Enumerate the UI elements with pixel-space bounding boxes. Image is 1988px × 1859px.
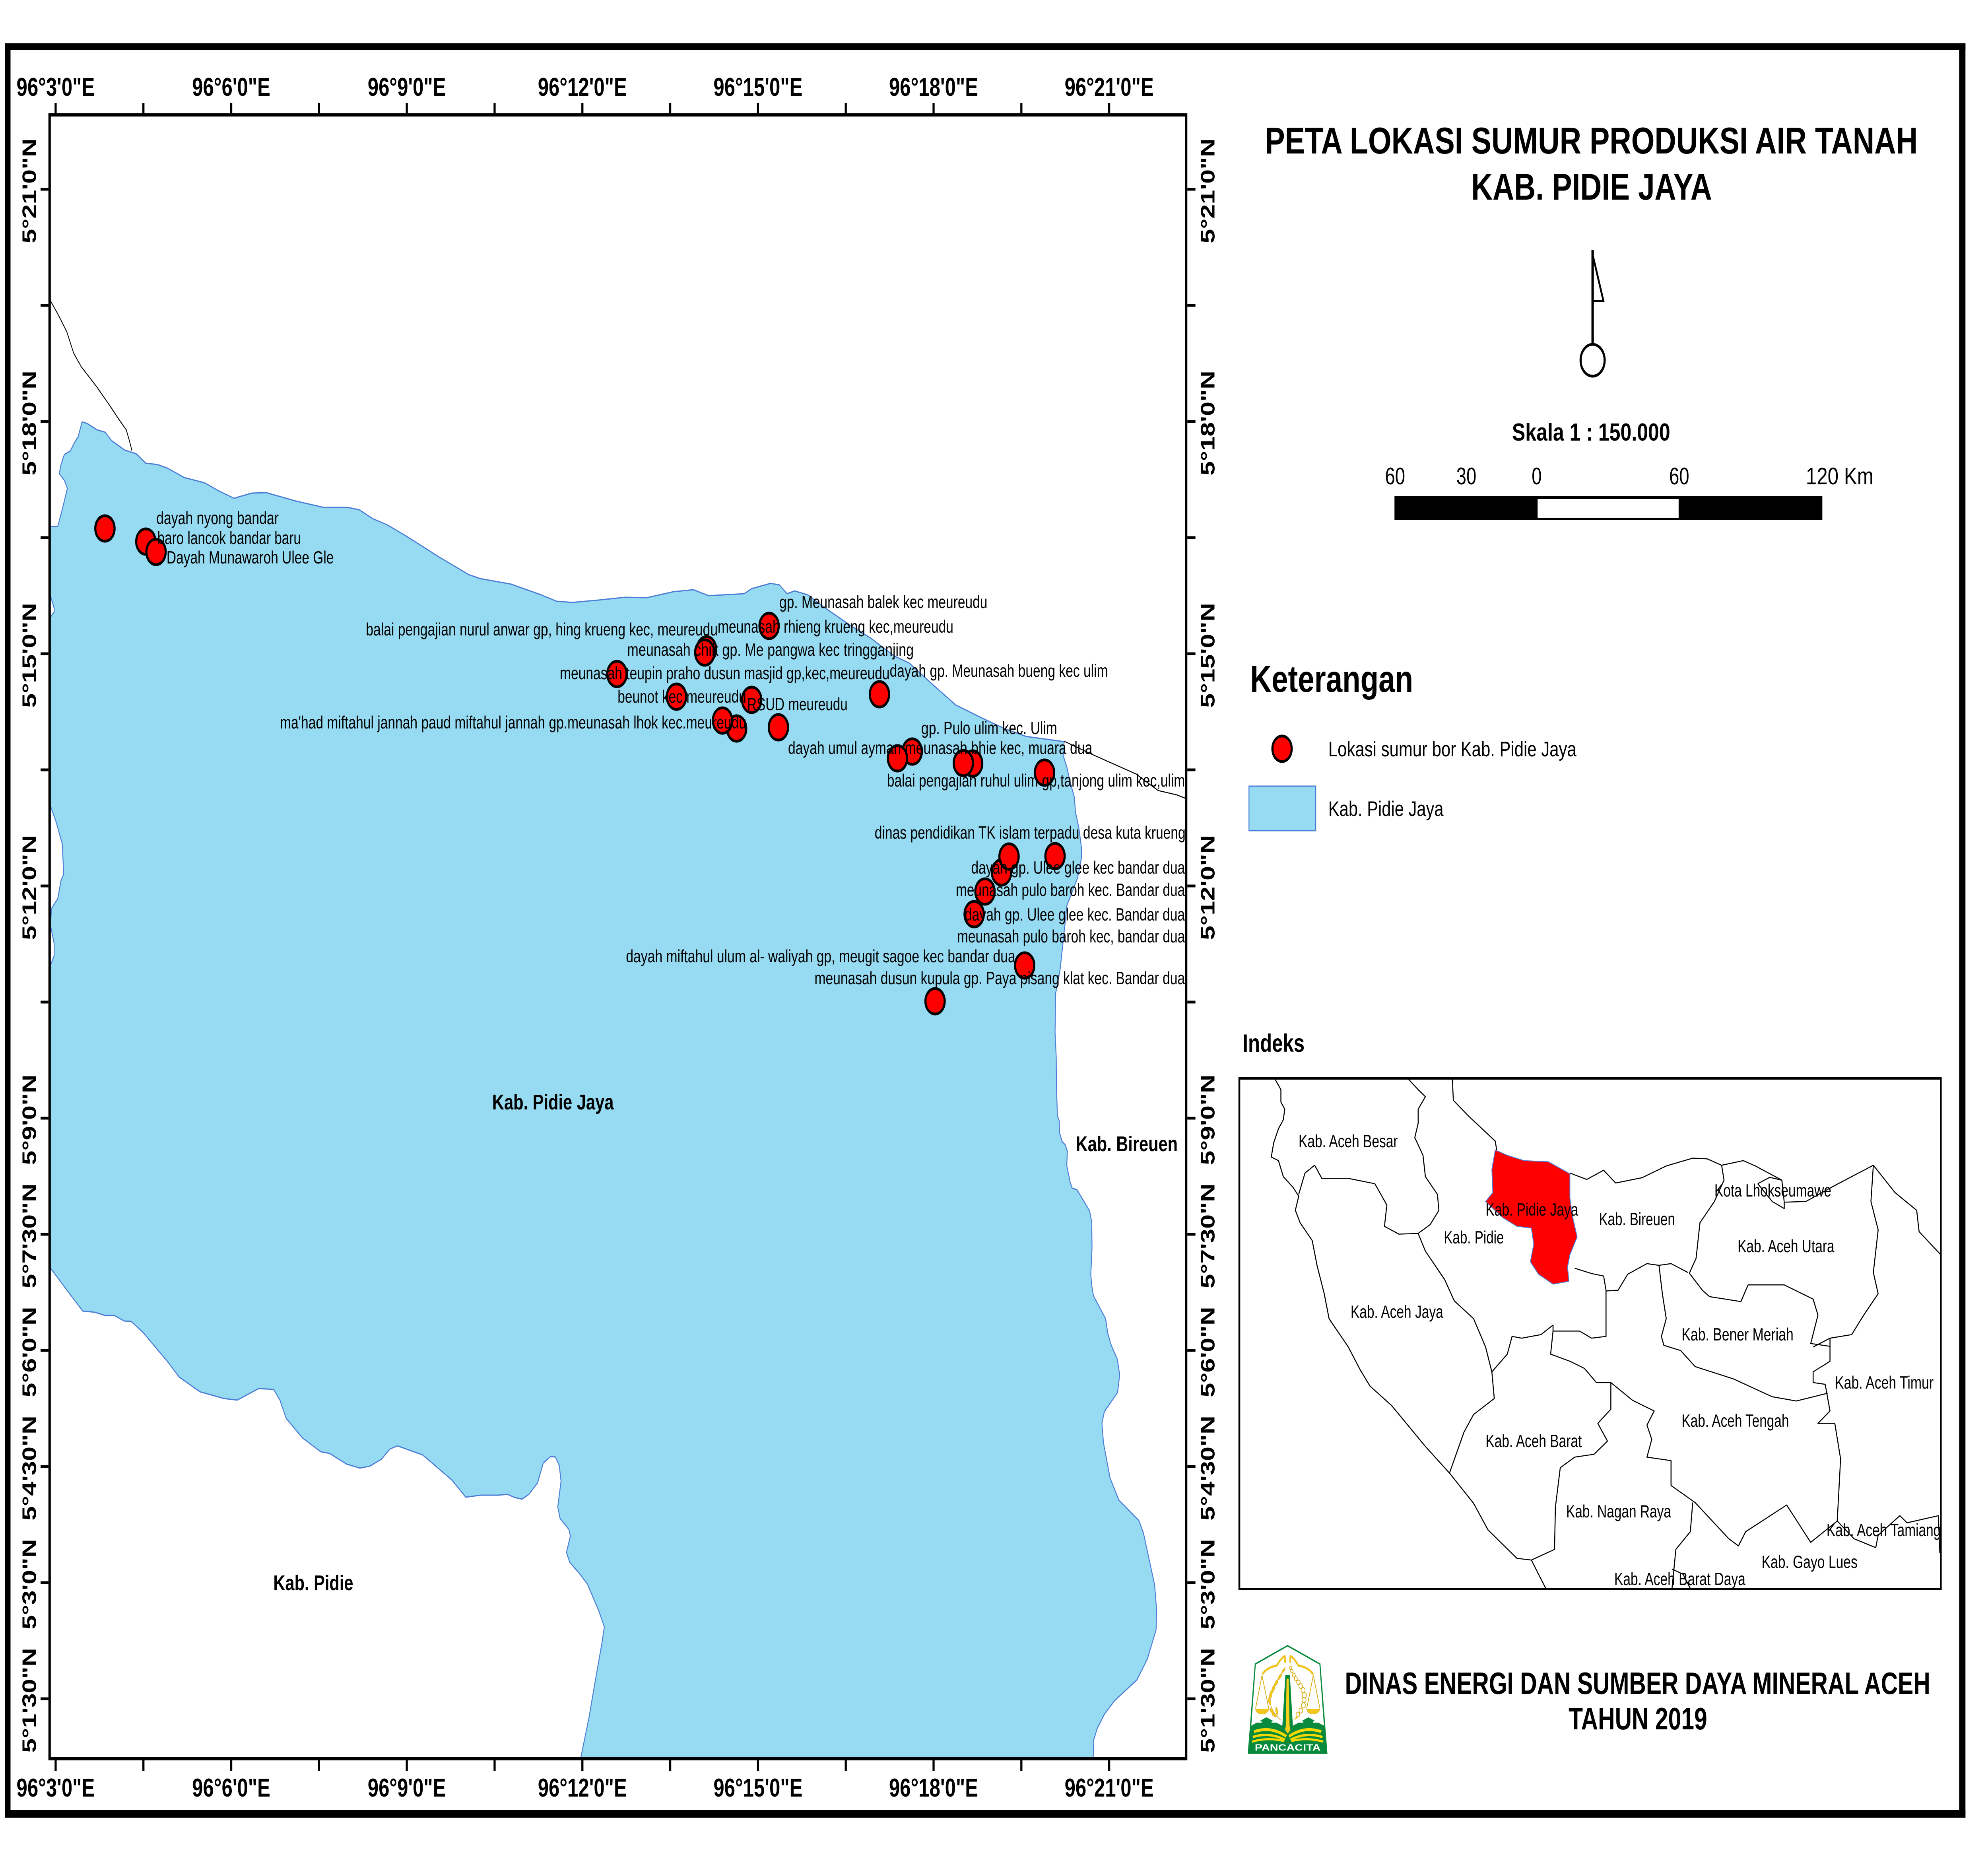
inset labels: Kab. Aceh Barat Daya [1614, 1570, 1745, 1589]
latitude labels right: 5°3'0"N [1197, 1539, 1219, 1630]
footer organisation text: DINAS ENERGI DAN SUMBER DAYA MINERAL ACEH [1345, 1666, 1930, 1701]
district name labels: Kab. Bireuen [1076, 1132, 1178, 1156]
inset labels: Kab. Gayo Lues [1762, 1552, 1858, 1572]
icon: north arrow [1580, 250, 1605, 376]
scale bar labels: 120 Km [1806, 463, 1873, 490]
inset labels: Kab. Aceh Barat [1485, 1432, 1582, 1451]
inset labels: Kab. Aceh Tengah [1681, 1411, 1789, 1431]
legend item: district area [1249, 786, 1444, 831]
latitude labels left [19, 138, 41, 1753]
scale bar labels: 0 [1532, 463, 1542, 490]
latitude labels left: 5°9'0"N [19, 1074, 41, 1165]
legend item: district area: Kab. Pidie Jaya [1328, 796, 1444, 820]
well location labels: meunasah dusun kupula gp. Paya pisang klat kec. Bandar dua [815, 969, 1185, 988]
index heading: Indeks [1242, 1029, 1305, 1057]
latitude labels right: 5°1'30"N [1197, 1648, 1219, 1753]
well location labels: dinas pendidikan TK islam terpadu desa kuta krueng [875, 823, 1186, 843]
longitude labels top [17, 73, 1154, 102]
longitude labels bottom [17, 1774, 1154, 1803]
longitude labels bottom: 96°3'0"E [17, 1774, 95, 1803]
legend heading: Keterangan [1250, 658, 1413, 700]
longitude labels top: 96°12'0"E [538, 73, 627, 102]
graticule ticks [41, 103, 1196, 1771]
latitude labels left: 5°18'0"N [19, 371, 41, 476]
latitude labels left: 5°12'0"N [19, 835, 41, 940]
well location labels: meunasah pulo baroh kec, bandar dua [957, 927, 1185, 946]
well location labels: meunasah pulo baroh kec. Bandar dua [956, 880, 1185, 900]
legend item: well location: Lokasi sumur bor Kab. Pidie Jaya [1328, 737, 1577, 761]
latitude labels left: 5°21'0"N [19, 138, 41, 243]
well location labels: Dayah Munawaroh Ulee Gle [167, 548, 334, 567]
inset labels: Kab. Aceh Timur [1835, 1373, 1934, 1393]
map neatline [50, 115, 1186, 1759]
longitude labels bottom: 96°21'0"E [1065, 1774, 1154, 1803]
inset labels: Kab. Bireuen [1599, 1210, 1675, 1229]
district name labels: Kab. Pidie [273, 1572, 353, 1595]
well location labels: meunasah chik gp. Me pangwa kec tringganjing [627, 640, 914, 660]
latitude labels left: 5°4'30"N [19, 1416, 41, 1521]
latitude labels right: 5°15'0"N [1197, 603, 1219, 708]
well location markers [95, 516, 1065, 1014]
longitude labels top: 96°15'0"E [713, 73, 802, 102]
longitude labels bottom: 96°9'0"E [368, 1774, 446, 1803]
icon: Aceh Pancacita emblem [1248, 1645, 1328, 1754]
inset labels: Kab. Nagan Raya [1566, 1502, 1671, 1521]
latitude labels right: 5°9'0"N [1197, 1074, 1219, 1165]
inset labels: Kota Lhokseumawe [1714, 1181, 1831, 1200]
latitude labels right [1197, 138, 1219, 1753]
footer organisation text: TAHUN 2019 [1569, 1701, 1707, 1736]
icon: Aceh Pancacita emblem: PANCACITA [1255, 1743, 1320, 1753]
well location labels: gp. Pulo ulim kec. Ulim [921, 719, 1057, 738]
longitude labels top: 96°9'0"E [368, 73, 446, 102]
well location labels: RSUD meureudu [747, 695, 848, 714]
inset labels: Kab. Pidie [1444, 1228, 1504, 1247]
well location labels: meunasah teupin praho dusun masjid gp,kec,meureudu [560, 664, 890, 683]
longitude labels bottom: 96°18'0"E [889, 1774, 978, 1803]
latitude labels left: 5°6'0"N [19, 1307, 41, 1397]
title [1265, 120, 1918, 208]
inset index map [1239, 1078, 1941, 1589]
latitude labels right: 5°12'0"N [1197, 835, 1219, 940]
latitude labels left: 5°15'0"N [19, 603, 41, 708]
scale bar labels: 60 [1669, 463, 1689, 490]
latitude labels left: 5°7'30"N [19, 1183, 41, 1288]
well location labels: beunot kec meureudu [617, 687, 746, 707]
longitude labels top: 96°3'0"E [17, 73, 95, 102]
title: PETA LOKASI SUMUR PRODUKSI AIR TANAH [1265, 120, 1918, 161]
well location labels: dayah umul ayman meunasah bhie kec, muara dua [788, 738, 1092, 758]
title: KAB. PIDIE JAYA [1471, 166, 1712, 208]
well location labels: baro lancok bandar baru [157, 528, 301, 548]
longitude labels bottom: 96°15'0"E [713, 1774, 802, 1803]
footer organisation text [1345, 1666, 1930, 1736]
inset labels: Kab. Aceh Tamiang [1827, 1521, 1941, 1540]
well location labels: dayah nyong bandar [156, 509, 279, 528]
latitude labels right: 5°6'0"N [1197, 1307, 1219, 1397]
scale text: Skala 1 : 150.000 [1512, 418, 1670, 446]
scale bar labels: 30 [1456, 463, 1476, 490]
scale bar labels [1385, 463, 1873, 490]
longitude labels top: 96°21'0"E [1065, 73, 1154, 102]
well location labels: gp. Meunasah balek kec meureudu [779, 592, 987, 612]
district name labels: Kab. Pidie Jaya [492, 1091, 614, 1114]
well location labels: dayah miftahul ulum al- waliyah gp, meugit sagoe kec bandar dua [626, 947, 1015, 966]
latitude labels left: 5°3'0"N [19, 1539, 41, 1630]
scale bar labels: 60 [1385, 463, 1405, 490]
well location labels: dayah gp. Ulee glee kec bandar dua [971, 858, 1185, 878]
well location labels: dayah gp. Meunasah bueng kec ulim [890, 661, 1108, 681]
longitude labels top: 96°6'0"E [192, 73, 270, 102]
inset boundary lines [1271, 1079, 1941, 1589]
inset labels [1299, 1132, 1941, 1589]
latitude labels right: 5°4'30"N [1197, 1416, 1219, 1521]
longitude labels top: 96°18'0"E [889, 73, 978, 102]
main map panel [50, 300, 1186, 1759]
well location labels: dayah gp. Ulee glee kec. Bandar dua [965, 905, 1185, 925]
well location labels [156, 509, 1186, 988]
scale bar [1394, 496, 1822, 520]
latitude labels right: 5°7'30"N [1197, 1183, 1219, 1288]
latitude labels left: 5°1'30"N [19, 1648, 41, 1753]
inset frame [1239, 1078, 1941, 1589]
latitude labels right: 5°18'0"N [1197, 371, 1219, 476]
longitude labels bottom: 96°6'0"E [192, 1774, 270, 1803]
inset labels: Kab. Aceh Besar [1299, 1132, 1398, 1151]
latitude labels right: 5°21'0"N [1197, 138, 1219, 243]
well location labels: balai pengajian ruhul ulim gp,tanjong ulim kec,ulim [887, 771, 1185, 791]
polygon: Kab. Pidie Jaya district [50, 422, 1157, 1759]
well location labels: ma'had miftahul jannah paud miftahul jannah gp.meunasah lhok kec.meureudu [280, 713, 746, 732]
well location labels: balai pengajian nurul anwar gp, hing krueng kec, meureudu [366, 620, 718, 639]
inset labels: Kab. Aceh Jaya [1351, 1302, 1443, 1322]
well location labels: meunasah rhieng krueng kec,meureudu [718, 617, 953, 637]
longitude labels bottom: 96°12'0"E [538, 1774, 627, 1803]
district name labels [273, 1091, 1178, 1595]
inset labels: Kab. Aceh Utara [1738, 1237, 1835, 1256]
inset labels: Kab. Pidie Jaya [1485, 1200, 1578, 1220]
inset labels: Kab. Bener Meriah [1681, 1325, 1794, 1344]
neighbouring boundary lines [50, 300, 1185, 798]
